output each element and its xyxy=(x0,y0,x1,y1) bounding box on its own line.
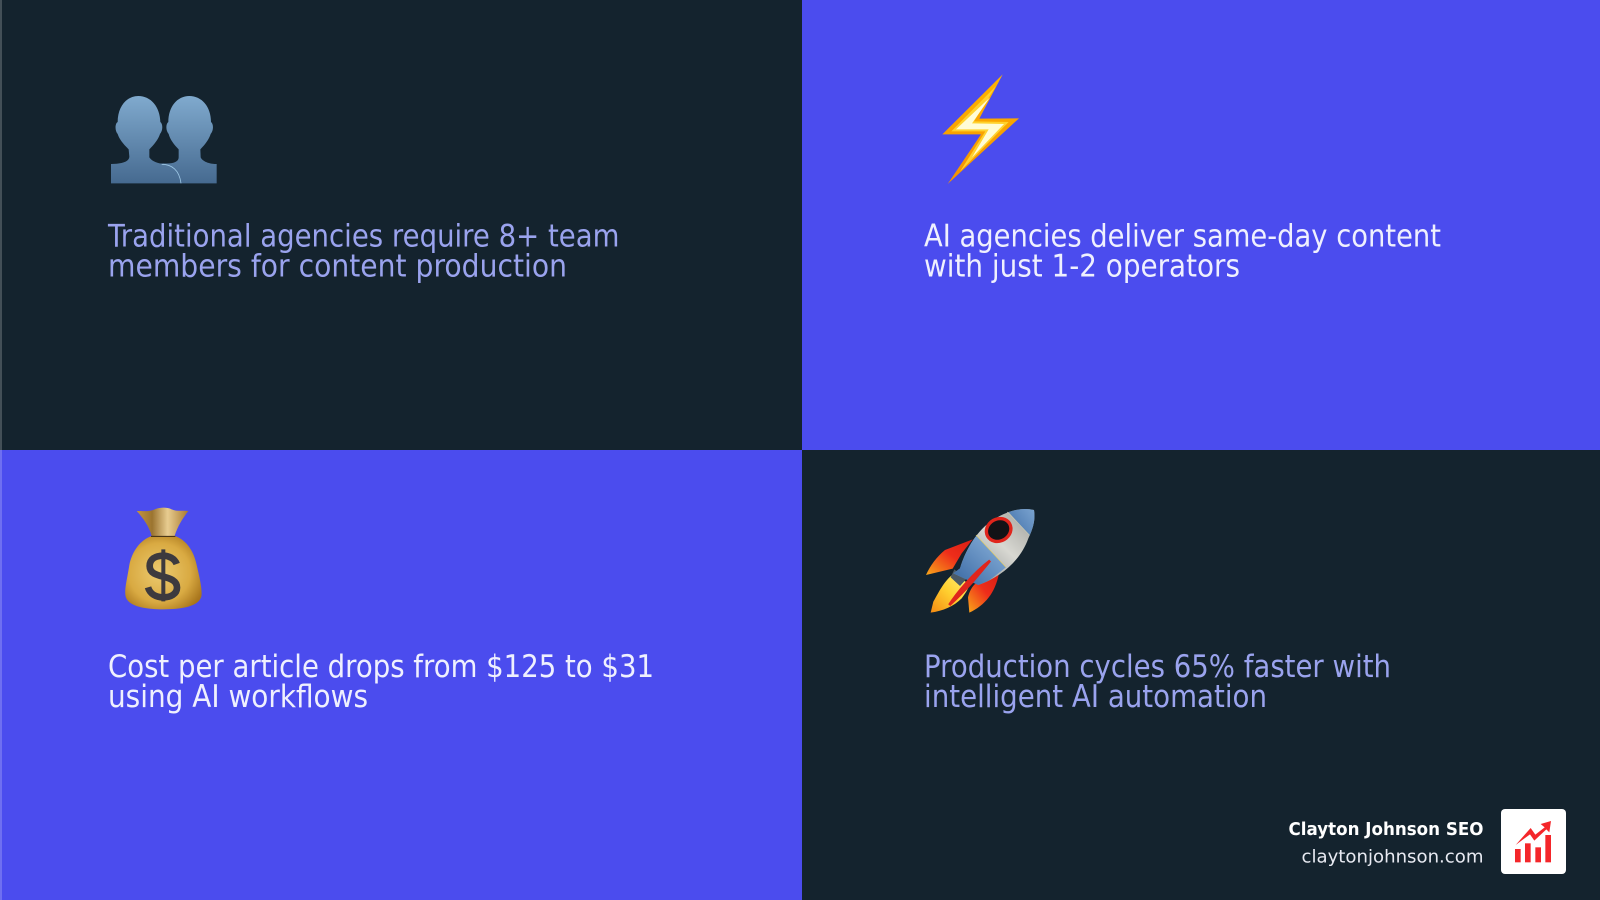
icon: lightning bolt xyxy=(942,74,1019,184)
text: cost per article: Cost per article drops from $125 to $31 xyxy=(108,649,654,685)
text: AI agencies: with just 1-2 operators xyxy=(924,248,1240,284)
brand block xyxy=(1288,809,1566,874)
panel: cost per article xyxy=(0,450,802,900)
text: cost per article xyxy=(108,649,654,715)
brand url: claytonjohnson.com xyxy=(1302,846,1484,868)
icon: money bag xyxy=(125,508,202,609)
icon: logo xyxy=(1501,809,1566,874)
text: cost per article: using AI workflows xyxy=(108,679,368,715)
icon: rocket xyxy=(926,509,1034,613)
text: production cycles: intelligent AI automation xyxy=(924,679,1267,715)
text: traditional agencies: Traditional agencies require 8+ team xyxy=(107,218,620,254)
icon: two silhouettes xyxy=(111,96,217,183)
text: production cycles: Production cycles 65% faster with xyxy=(924,649,1391,685)
text: AI agencies: AI agencies deliver same-day content xyxy=(924,218,1441,254)
panel: traditional agencies xyxy=(0,0,802,450)
text: AI agencies xyxy=(924,218,1441,284)
text: traditional agencies xyxy=(107,218,620,284)
panel: AI agencies xyxy=(802,0,1600,450)
panel: production cycles xyxy=(926,509,1566,874)
text: traditional agencies: members for content production xyxy=(108,248,567,284)
text: production cycles xyxy=(924,649,1391,715)
brand name: Clayton Johnson SEO xyxy=(1288,820,1484,840)
